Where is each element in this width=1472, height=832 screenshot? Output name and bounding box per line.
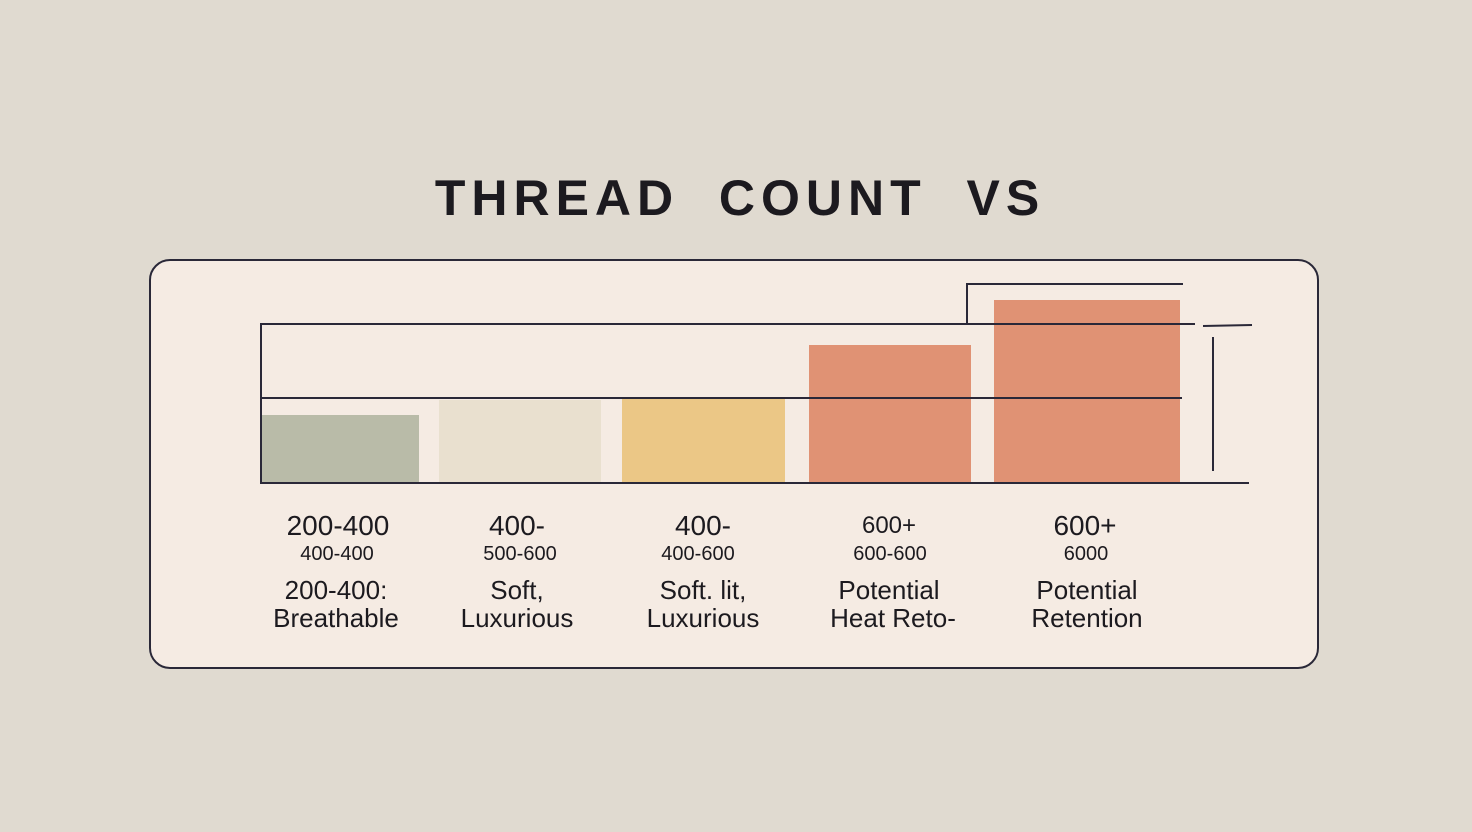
title: THREAD COUNT VS xyxy=(435,170,1045,226)
labels: Potential xyxy=(1036,575,1138,605)
labels: 600-600 xyxy=(853,543,927,565)
bar chart xyxy=(260,284,1252,484)
panel: chart card xyxy=(150,260,1318,668)
labels: Breathable xyxy=(273,603,399,633)
labels: 6000 xyxy=(1064,543,1108,565)
labels: Potential xyxy=(838,575,940,605)
labels: Heat Reto- xyxy=(830,603,956,633)
labels: 400- xyxy=(675,510,731,541)
labels: Soft. lit, xyxy=(660,575,746,605)
labels: 400-400 xyxy=(300,543,374,565)
labels: Luxurious xyxy=(647,603,759,633)
labels xyxy=(273,510,1143,633)
labels: 600+ xyxy=(1053,510,1117,541)
labels: 400-600 xyxy=(661,543,735,565)
labels: 200-400: xyxy=(285,575,387,605)
labels: Luxurious xyxy=(461,603,573,633)
labels: Soft, xyxy=(490,575,544,605)
labels: 500-600 xyxy=(483,543,557,565)
labels: 600+ xyxy=(862,512,916,539)
labels: 200-400 xyxy=(287,510,389,541)
labels: Retention xyxy=(1031,603,1143,633)
labels: 400- xyxy=(489,510,545,541)
